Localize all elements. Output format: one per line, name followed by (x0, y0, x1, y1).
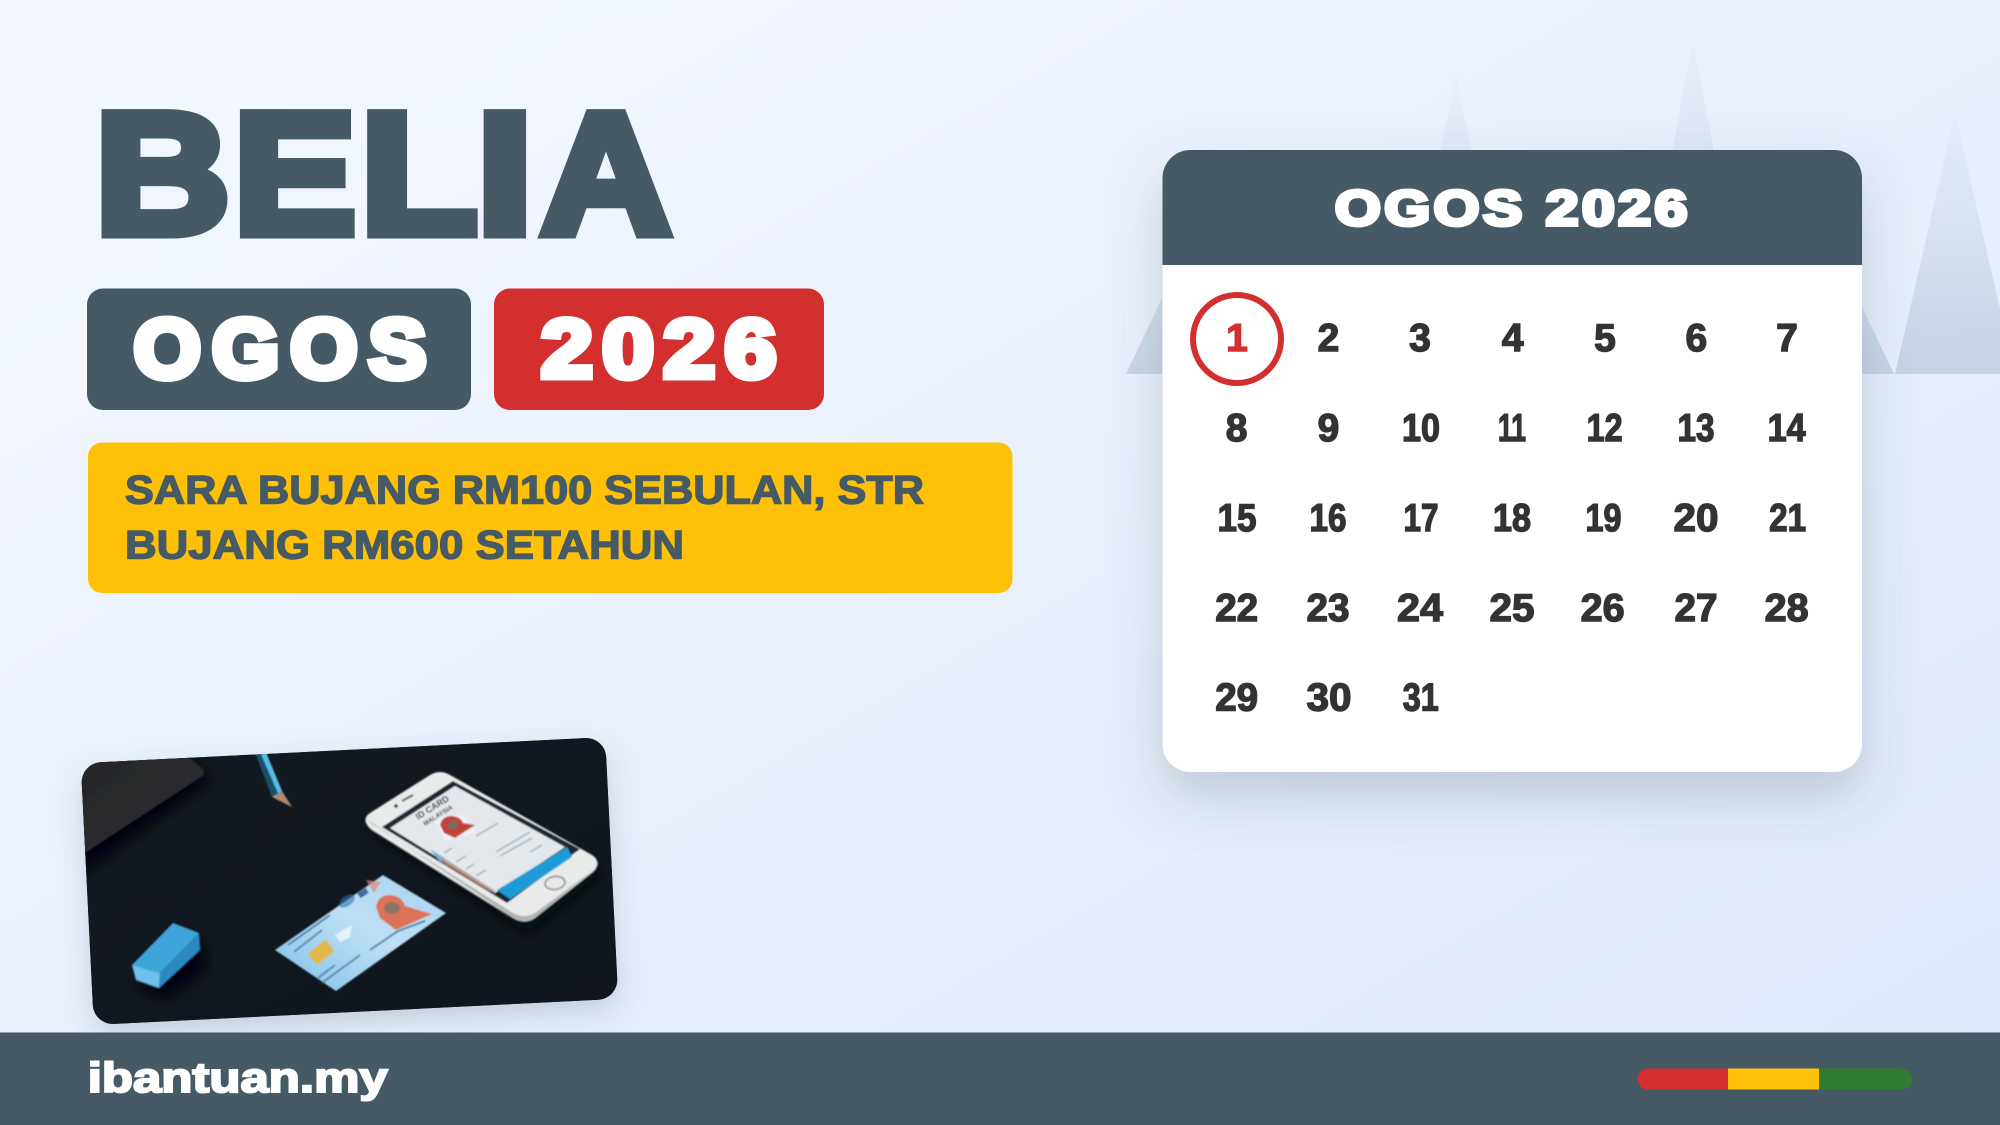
badge: 2026 (494, 288, 824, 410)
calendar dates: 30 (1306, 677, 1352, 720)
calendar dates: 17 (1404, 497, 1438, 540)
calendar dates: 12 (1587, 407, 1623, 450)
calendar dates: 15 (1218, 497, 1256, 540)
calendar dates: 22 (1215, 587, 1258, 630)
badge: OGOS: OGOS (134, 302, 438, 395)
footer site name: ibantuan.my (88, 1054, 388, 1101)
calendar dates: 7 (1776, 317, 1798, 360)
icon: tablet corner (82, 758, 210, 874)
calendar dates: 26 (1581, 587, 1625, 630)
phone speaker and camera (394, 795, 413, 808)
calendar dates: 4 (1502, 317, 1524, 360)
calendar dates: 11 (1498, 407, 1526, 450)
calendar dates: 10 (1402, 407, 1440, 450)
phone ID title: MALAYSIA (422, 804, 455, 828)
phone photo bleed (430, 849, 497, 892)
calendar dates: 18 (1493, 497, 1531, 540)
phone detail lines (444, 823, 542, 876)
calendar dates: 14 (1768, 407, 1806, 450)
panel: calendar (1162, 150, 1862, 772)
icon: blue eraser (132, 923, 206, 998)
phone screen (382, 781, 580, 903)
badge: OGOS (87, 288, 471, 410)
card cloud (335, 925, 352, 942)
colour strip (1638, 1068, 1912, 1090)
title: BELIA (95, 78, 671, 270)
calendar dates (1215, 317, 1809, 720)
calendar dates: 6 (1686, 317, 1707, 360)
calendar dates: 5 (1594, 317, 1616, 360)
card logos (337, 880, 381, 910)
title: BELIA: A (541, 78, 671, 270)
title: BELIA: L (360, 78, 478, 270)
calendar dates: 3 (1409, 317, 1431, 360)
icon: phone (365, 772, 601, 932)
calendar dates: 16 (1310, 497, 1346, 540)
footer bar (0, 1032, 2000, 1125)
subtitle banner (88, 442, 1012, 593)
calendar header (1162, 150, 1862, 265)
icon: ID card (275, 875, 446, 991)
calendar dates: 13 (1678, 407, 1714, 450)
calendar dates: 31 (1403, 677, 1439, 720)
calendar dates: 23 (1306, 587, 1350, 630)
badge: 2026: 2026 (541, 302, 786, 395)
calendar dates: 9 (1318, 407, 1339, 450)
calendar dates: 28 (1765, 587, 1809, 630)
calendar dates: 21 (1769, 497, 1806, 540)
photo: phone and ID card on a dark desk (74, 738, 627, 1032)
card chip (307, 939, 335, 965)
card text lines (288, 915, 425, 983)
subtitle line 1: SARA BUJANG RM100 SEBULAN, STR (125, 468, 924, 512)
phone app button (497, 847, 572, 899)
calendar title: OGOS 2026 (1335, 182, 1691, 236)
calendar dates: 20 (1674, 497, 1718, 540)
calendar dates: 1 (1226, 317, 1248, 360)
phone ID portrait (433, 815, 475, 840)
phone home button (544, 875, 566, 891)
card hijab (376, 895, 432, 930)
calendar dates: 29 (1215, 677, 1258, 720)
title: BELIA: E (234, 78, 356, 270)
calendar dates: 8 (1226, 407, 1247, 450)
icon: pencil (255, 754, 292, 808)
title: BELIA: I (476, 78, 533, 270)
calendar dates: 27 (1674, 587, 1718, 630)
subtitle line 2: BUJANG RM600 SETAHUN (125, 524, 684, 568)
background trees (1126, 40, 2000, 374)
calendar dates: 24 (1397, 587, 1443, 630)
calendar dates: 25 (1490, 587, 1534, 630)
calendar dates: 19 (1586, 497, 1622, 540)
highlighted date circle (1193, 295, 1281, 383)
phone ID title: ID CARD (414, 793, 451, 822)
title: BELIA: B (95, 78, 230, 270)
calendar dates: 2 (1318, 317, 1339, 360)
